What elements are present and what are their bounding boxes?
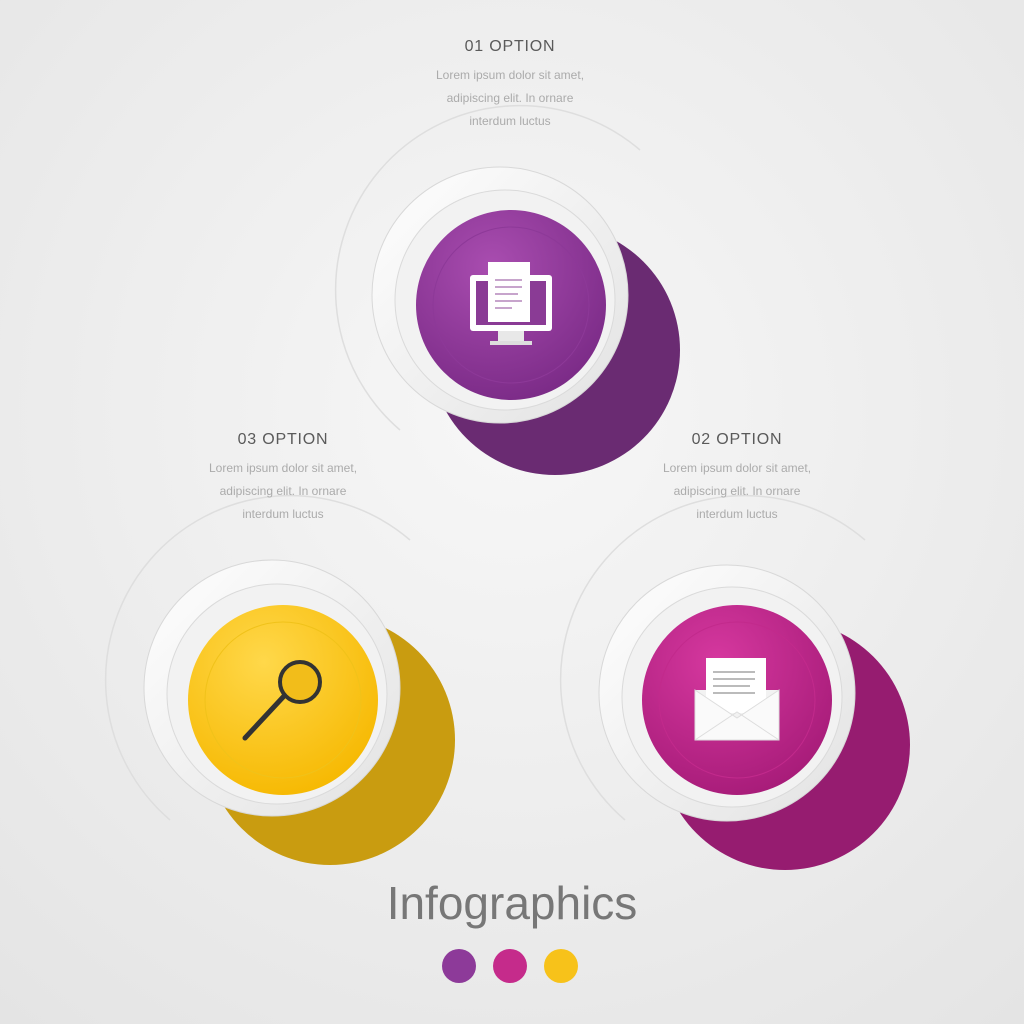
icon: envelope <box>695 658 779 740</box>
group: 02 option circle <box>561 496 910 870</box>
text: 02 option: interdum luctus <box>696 507 778 521</box>
text: 03 option <box>209 431 357 521</box>
text: 01 option: interdum luctus <box>469 114 551 128</box>
text: 03 option: interdum luctus <box>242 507 324 521</box>
icon: magnifier <box>245 662 320 738</box>
text: 03 option: adipiscing elit. In ornare <box>220 484 346 498</box>
group: 03 option circle <box>106 496 455 865</box>
group: 01 option circle <box>336 106 680 475</box>
title dots <box>442 949 578 983</box>
icon: monitor document <box>470 262 552 345</box>
text: 01 option: adipiscing elit. In ornare <box>447 91 573 105</box>
text: 01 option: 01 OPTION <box>465 38 555 55</box>
text: 02 option: 02 OPTION <box>692 431 782 448</box>
text: 01 option <box>436 38 584 128</box>
text: 03 option: Lorem ipsum dolor sit amet, <box>209 461 357 475</box>
text: 02 option: adipiscing elit. In ornare <box>674 484 800 498</box>
text: 01 option: Lorem ipsum dolor sit amet, <box>436 68 584 82</box>
text: 02 option <box>663 431 811 521</box>
title: Infographics <box>387 877 637 929</box>
text: 02 option: Lorem ipsum dolor sit amet, <box>663 461 811 475</box>
text: 03 option: 03 OPTION <box>238 431 328 448</box>
